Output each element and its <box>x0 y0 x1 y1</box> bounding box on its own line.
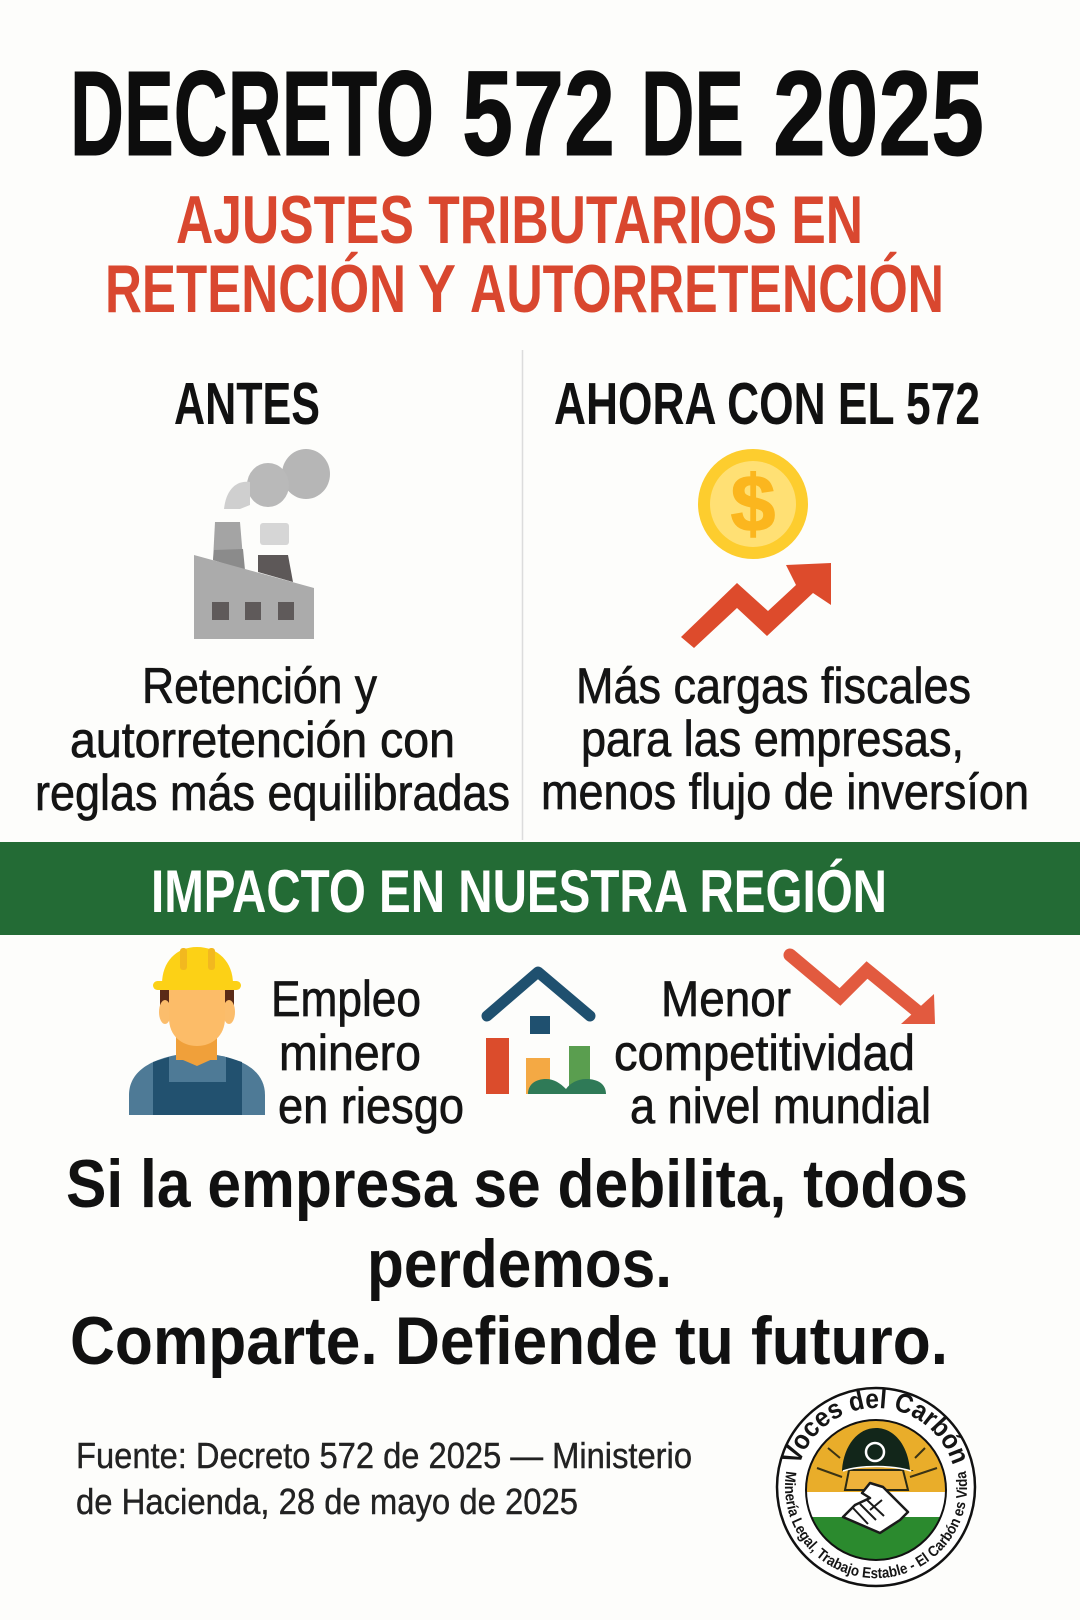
title <box>70 45 984 181</box>
text: competitividad <box>614 971 931 1134</box>
source note: Fuente: Decreto 572 de 2025 — Ministerio <box>76 1435 692 1476</box>
subtitle: RETENCIÓN <box>105 251 406 327</box>
text: ahora: para las empresas, <box>581 711 964 767</box>
title: DE <box>641 45 744 181</box>
icon: falling arrow <box>790 955 935 1024</box>
subtitle <box>105 182 944 327</box>
logo: voces del carbón <box>776 1386 976 1588</box>
title: 572 <box>462 45 615 181</box>
banner: impacto: IMPACTO EN NUESTRA REGIÓN <box>151 858 887 925</box>
text: empleo <box>271 971 464 1134</box>
closing message: perdemos. <box>367 1226 672 1302</box>
text: empleo: minero <box>279 1025 421 1081</box>
panel: antes <box>35 371 510 821</box>
title: DECRETO <box>70 45 434 181</box>
text: competitividad: Menor <box>661 971 791 1027</box>
text: empleo: en riesgo <box>278 1078 464 1134</box>
panel: ahora <box>541 371 1029 820</box>
text: ahora: Más cargas fiscales <box>576 658 971 714</box>
text: competitividad: a nivel mundial <box>630 1078 931 1134</box>
text: empleo: Empleo <box>271 971 421 1027</box>
text: antes: autorretención con <box>70 712 455 768</box>
text: antes: Retención y <box>142 658 377 714</box>
icon: coin <box>698 449 808 559</box>
logo: voces del carbón: Minería Legal, Trabajo Estable - El Carbón es Vida <box>784 1470 968 1578</box>
text: ahora: menos flujo de inversíon <box>541 764 1029 820</box>
banner: impacto <box>0 842 1080 935</box>
subtitle: AJUSTES TRIBUTARIOS EN <box>176 182 863 258</box>
text: antes: reglas más equilibradas <box>35 765 510 821</box>
closing message: Comparte. Defiende tu futuro. <box>70 1303 948 1379</box>
subtitle: Y <box>418 251 456 327</box>
closing message: Si la empresa se debilita, todos <box>66 1146 968 1222</box>
title: 2025 <box>773 45 984 181</box>
icon: coin: $ <box>731 459 775 548</box>
logo: voces del carbón: Voces del Carbón <box>782 1390 965 1464</box>
source note <box>76 1435 692 1522</box>
text: ahora <box>541 658 1029 820</box>
icon: house and bars <box>486 972 606 1094</box>
text: antes <box>35 658 510 821</box>
heading: antes: ANTES <box>174 371 320 437</box>
icon: factory <box>194 449 330 639</box>
icon: miner <box>129 947 265 1115</box>
icon: rising arrow <box>681 563 831 648</box>
text: competitividad: competitividad <box>614 1025 915 1081</box>
closing message <box>66 1146 968 1379</box>
source note: de Hacienda, 28 de mayo de 2025 <box>76 1481 578 1522</box>
